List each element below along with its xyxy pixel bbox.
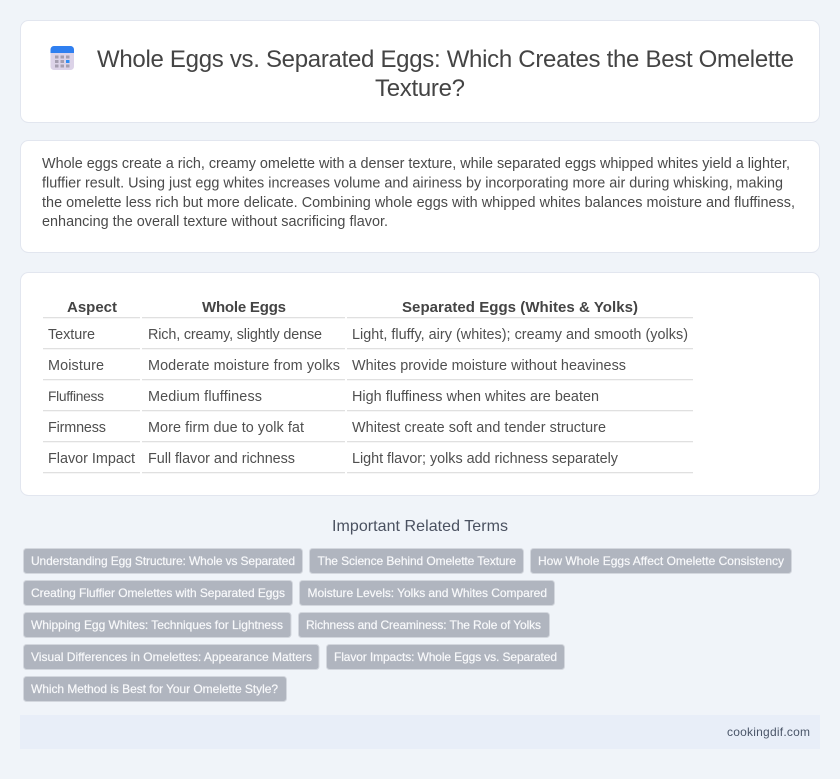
tag: Which Method is Best for Your Omelette Style? <box>31 682 278 696</box>
table row: flavor impact: Flavor Impact <box>48 451 135 467</box>
tag <box>310 548 524 574</box>
table row: fluffiness <box>48 389 599 405</box>
table row: moisture <box>48 358 626 374</box>
table row: texture: Rich, creamy, slightly dense <box>148 327 322 343</box>
table row: firmness: Whitest create soft and tender structure <box>352 420 606 436</box>
table row: fluffiness: High fluffiness when whites are beaten <box>352 389 599 405</box>
table row: fluffiness: Medium fluffiness <box>148 389 262 405</box>
icon: calendar <box>50 46 74 70</box>
table row: fluffiness: Fluffiness <box>48 389 104 404</box>
tag: Visual Differences in Omelettes: Appearance Matters <box>31 650 312 664</box>
table header <box>67 299 638 316</box>
tag <box>530 548 792 574</box>
table header: Whole Eggs <box>202 299 286 316</box>
tag <box>24 580 292 606</box>
tag: Understanding Egg Structure: Whole vs Separated <box>31 554 295 568</box>
tag: Flavor Impacts: Whole Eggs vs. Separated <box>334 650 557 664</box>
panel: comparison table <box>20 272 820 496</box>
panel: title card <box>20 20 820 122</box>
title <box>97 46 794 102</box>
text block: summary: fluffier result. Using just egg whites increases volume and airiness by incorporating more air during whisking, making <box>42 176 783 192</box>
table row: moisture: Moisture <box>48 358 104 374</box>
table row: flavor impact <box>48 451 619 467</box>
table row: flavor impact: Full flavor and richness <box>148 451 295 467</box>
tag <box>298 612 550 638</box>
table row: texture: Texture <box>48 327 95 343</box>
tag: Richness and Creaminess: The Role of Yolks <box>306 618 541 632</box>
text block: summary: enhancing the overall texture without sacrificing flavor. <box>42 214 388 230</box>
tag: The Science Behind Omelette Texture <box>318 554 516 568</box>
title: Texture? <box>375 75 465 102</box>
title: Whole Eggs vs. Separated Eggs: Which Creates the Best Omelette <box>97 46 794 73</box>
table row: flavor impact: Light flavor; yolks add richness separately <box>352 451 619 467</box>
text block: summary <box>42 156 795 230</box>
footer <box>20 715 820 749</box>
tag <box>300 580 554 606</box>
tag <box>24 676 286 702</box>
tag <box>24 548 302 574</box>
table row: firmness: More firm due to yolk fat <box>148 420 304 436</box>
panel: summary paragraph <box>20 140 820 252</box>
tag list: related terms <box>24 548 792 702</box>
footer: cookingdif.com <box>727 725 810 739</box>
tag <box>24 644 319 670</box>
table header: Separated Eggs (Whites & Yolks) <box>402 299 638 316</box>
text block: summary: Whole eggs create a rich, creamy omelette with a denser texture, while separated eggs whipped whites yield a lighter, <box>42 156 790 172</box>
tag: Creating Fluffier Omelettes with Separated Eggs <box>31 586 285 600</box>
table header: Aspect <box>67 299 117 316</box>
table row: firmness: Firmness <box>48 420 106 436</box>
table row: moisture: Whites provide moisture without heaviness <box>352 358 626 374</box>
table row: texture: Light, fluffy, airy (whites); creamy and smooth (yolks) <box>352 327 688 343</box>
table row: firmness <box>48 420 606 436</box>
table row: texture <box>48 327 688 343</box>
tag: How Whole Eggs Affect Omelette Consistency <box>538 554 784 568</box>
tag: Moisture Levels: Yolks and Whites Compared <box>308 586 547 600</box>
heading: related terms: Important Related Terms <box>332 518 508 535</box>
text block: summary: the omelette less rich but more delicate. Combining whole eggs with whipped whites balances moisture and fluffiness, <box>42 195 795 211</box>
table row: moisture: Moderate moisture from yolks <box>148 358 340 374</box>
tag <box>326 644 564 670</box>
tag: Whipping Egg Whites: Techniques for Lightness <box>31 618 283 632</box>
tag <box>24 612 291 638</box>
